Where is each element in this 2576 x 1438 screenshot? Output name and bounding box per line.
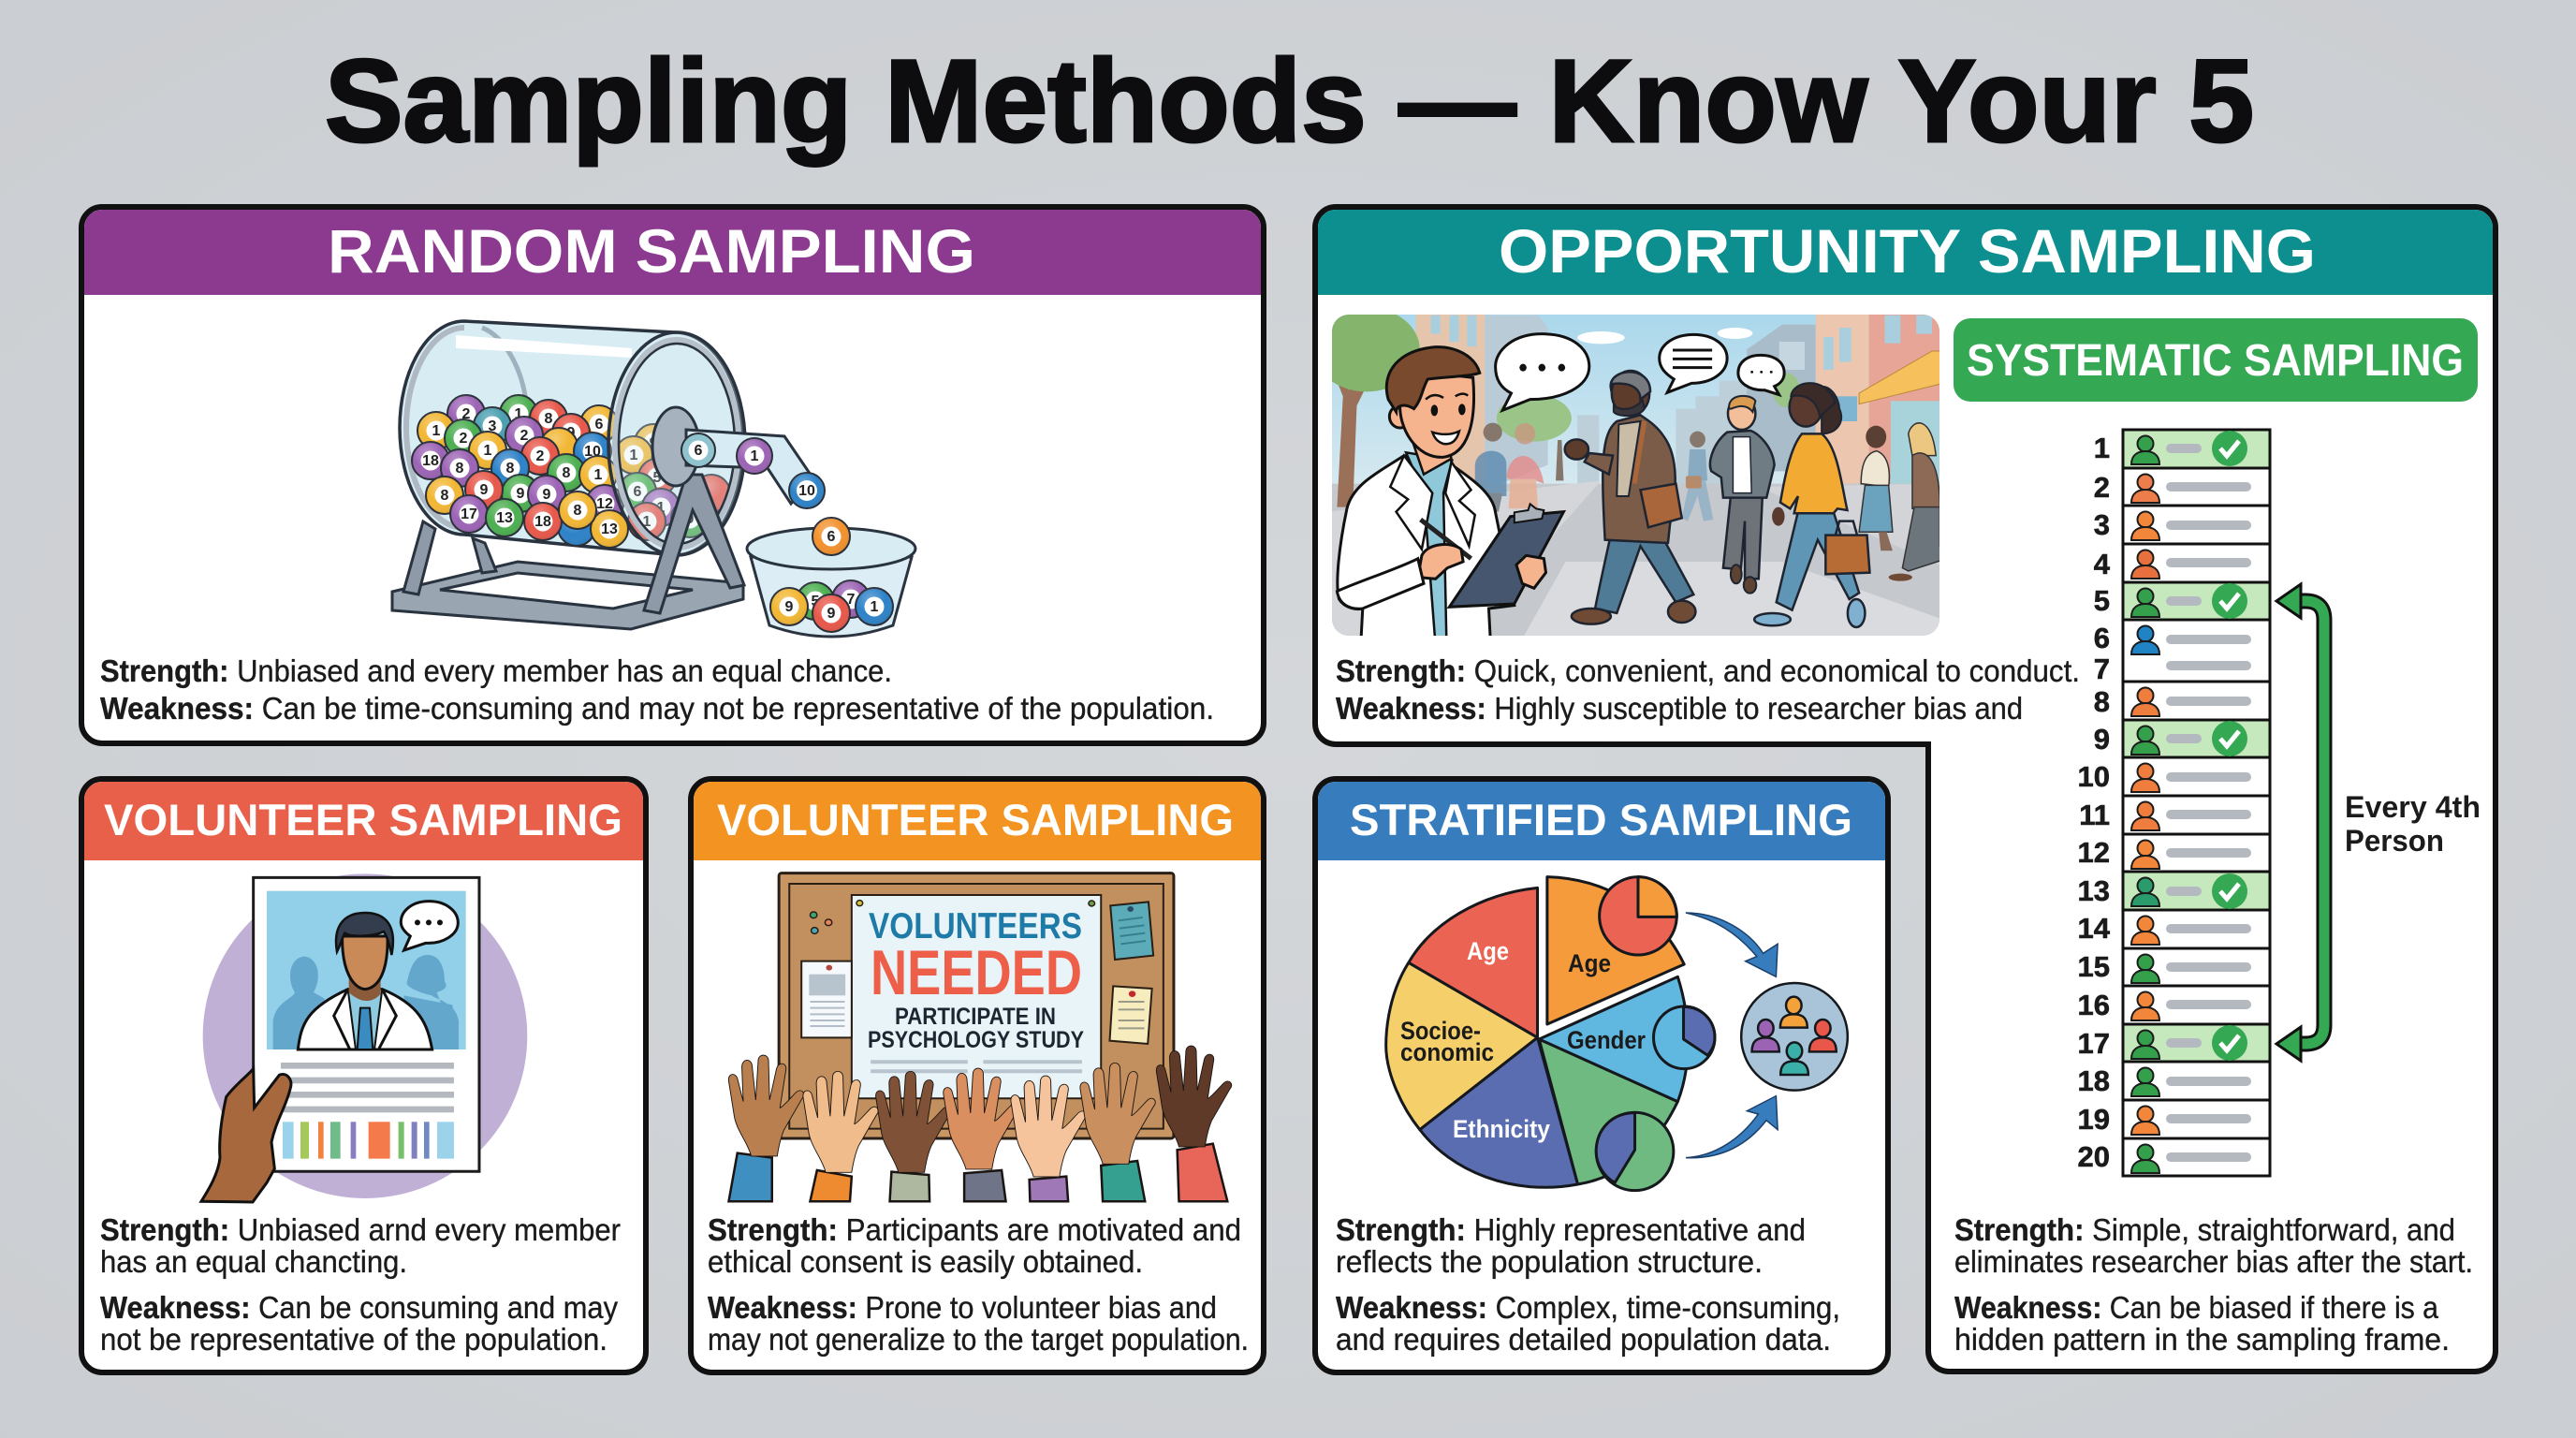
label: every 4th person: Person xyxy=(2345,824,2444,858)
text: volunteer strength and weakness: Weakness: Can be consuming and may xyxy=(100,1290,618,1325)
poster text xyxy=(868,906,1084,1053)
arrow: every fourth person interval xyxy=(2276,584,2324,1061)
header: stratified sampling xyxy=(1318,782,1885,860)
flyer page xyxy=(254,877,479,1171)
badge: systematic sampling: SYSTEMATIC SAMPLING xyxy=(1967,336,2464,386)
flyer photo xyxy=(267,891,466,1049)
pie labels: Gender xyxy=(1567,1026,1646,1054)
balls inside drum: 1 xyxy=(630,448,638,463)
balls inside drum: 9 xyxy=(567,425,576,441)
drum rear ring xyxy=(406,328,464,528)
background pedestrians xyxy=(1475,423,1713,521)
text: random strength and weakness xyxy=(100,653,1214,726)
row numbers: 2 xyxy=(2094,471,2110,504)
header: random sampling: RANDOM SAMPLING xyxy=(328,216,975,286)
row numbers: 15 xyxy=(2078,950,2110,983)
row numbers: 13 xyxy=(2078,874,2110,907)
balls inside drum: 9 xyxy=(543,487,551,503)
background pedestrian in brown jacket xyxy=(1889,422,1939,581)
text: systematic strength and weakness: eliminates researcher bias after the start. xyxy=(1954,1244,2473,1279)
panel: random sampling xyxy=(81,207,1264,743)
row numbers xyxy=(2078,432,2111,1173)
text: systematic strength and weakness: Strength: Simple, straightforward, and xyxy=(1954,1212,2455,1247)
right buildings xyxy=(1747,315,1939,484)
text: stratified strength and weakness: Strength: Highly representative and xyxy=(1336,1212,1806,1247)
text: systematic strength and weakness: Weakness: Can be biased if there is a xyxy=(1954,1290,2439,1325)
balls inside drum: 1 xyxy=(643,514,651,530)
balls inside drum: 5 xyxy=(653,470,662,486)
poster text: NEEDED xyxy=(871,937,1082,1008)
collection cup: 7 xyxy=(847,592,856,608)
row numbers: 1 xyxy=(2094,432,2110,464)
title: Sampling Methods — Know Your 5 xyxy=(325,37,2254,167)
illustration: researcher approaching people on street xyxy=(1313,307,1948,646)
pie labels: Age xyxy=(1568,949,1611,977)
illustration: stratified pie chart xyxy=(1386,877,1848,1191)
speech bubbles xyxy=(1496,334,1784,410)
text: volunteer strength and weakness xyxy=(100,1212,621,1357)
balls inside drum: 2 xyxy=(462,406,471,422)
person icons xyxy=(2131,436,2159,1173)
header: stratified sampling: STRATIFIED SAMPLING xyxy=(1350,795,1852,844)
sky xyxy=(1332,315,1939,484)
label: every 4th person xyxy=(2345,790,2481,858)
balls inside drum: 1 xyxy=(594,467,603,483)
drum front ring xyxy=(608,332,745,555)
text: volunteer board strength and weakness: may not generalize to the target population. xyxy=(708,1322,1249,1357)
balls inside drum: 1 xyxy=(432,423,441,439)
list rows xyxy=(2123,430,2270,1176)
lavender circle xyxy=(203,873,527,1198)
balls inside drum: 1 xyxy=(484,443,492,459)
balls inside drum: 18 xyxy=(422,453,439,469)
left note xyxy=(801,961,852,1037)
row numbers: 10 xyxy=(2078,760,2110,793)
header: random sampling xyxy=(84,210,1261,295)
illustration: lottery drum with numbered balls xyxy=(392,321,915,637)
text: volunteer strength and weakness: not be representative of the population. xyxy=(100,1322,607,1357)
poster text: VOLUNTEERS xyxy=(869,906,1082,946)
balls inside drum: 8 xyxy=(563,465,571,481)
balls in chute: 1 xyxy=(751,448,759,464)
balls in chute xyxy=(681,433,825,508)
poster placeholder lines xyxy=(871,1062,1082,1071)
raised hands xyxy=(728,1046,1232,1201)
left buildings xyxy=(1415,315,1548,483)
panel: stratified sampling xyxy=(1315,779,1888,1372)
holding hand xyxy=(201,1069,291,1202)
man in grey jacket xyxy=(1710,396,1775,594)
pie labels: Age xyxy=(1467,937,1509,965)
balls inside drum: 9 xyxy=(650,435,658,451)
balls inside drum: 10 xyxy=(584,444,601,460)
numbered sampling frame list xyxy=(2078,430,2270,1176)
header: volunteer sampling red xyxy=(84,782,643,860)
collection cup: 9 xyxy=(785,599,794,615)
balls inside drum: 8 xyxy=(506,461,515,477)
bubble contents xyxy=(1519,350,1773,374)
drum cylinder xyxy=(400,321,743,555)
header: volunteer sampling orange xyxy=(694,782,1261,860)
text: volunteer board strength and weakness: Weakness: Prone to volunteer bias and xyxy=(708,1290,1217,1325)
illustration: hand holding recruitment flyer xyxy=(201,873,527,1202)
drum stand base xyxy=(392,562,743,629)
text: random strength and weakness: Weakness: Can be time-consuming and may not be representative of the population. xyxy=(100,691,1214,726)
pie labels: Socioe- xyxy=(1400,1017,1481,1045)
right yellow note xyxy=(1110,986,1152,1044)
text: systematic strength and weakness: hidden pattern in the sampling frame. xyxy=(1954,1322,2450,1357)
drum inner band xyxy=(482,328,526,403)
text: opportunity strength and weakness xyxy=(1336,653,2080,726)
curved arrows xyxy=(1686,913,1778,1158)
text: volunteer board strength and weakness: ethical consent is easily obtained. xyxy=(708,1244,1143,1279)
balls inside drum: 9 xyxy=(480,482,489,498)
flyer colour strip xyxy=(283,1122,454,1159)
drum rear legs xyxy=(403,521,496,594)
header: opportunity sampling: OPPORTUNITY SAMPLING xyxy=(1499,216,2316,286)
balls inside drum: 2 xyxy=(520,428,529,444)
text: stratified strength and weakness: Weakness: Complex, time-consuming, xyxy=(1336,1290,1840,1325)
poster text: PSYCHOLOGY STUDY xyxy=(868,1027,1084,1053)
balls inside drum: 1 xyxy=(657,500,666,516)
collection cup: 1 xyxy=(871,599,879,615)
target sample circle xyxy=(1741,983,1848,1091)
balls inside drum: 8 xyxy=(441,488,449,504)
cork board xyxy=(779,873,1174,1138)
balls inside drum: 8 xyxy=(545,411,553,427)
row numbers: 4 xyxy=(2094,548,2111,580)
text: volunteer board strength and weakness xyxy=(708,1212,1249,1357)
balls inside drum: 8 xyxy=(456,461,464,477)
collection cup: 9 xyxy=(827,606,836,622)
selected row check marks xyxy=(2212,431,2247,1061)
row numbers: 11 xyxy=(2079,799,2110,831)
balls inside drum: 6 xyxy=(595,417,604,433)
header: opportunity sampling xyxy=(1318,210,2493,295)
background pedestrian in skirt xyxy=(1859,426,1893,550)
text: stratified strength and weakness: reflects the population structure. xyxy=(1336,1244,1763,1279)
woman in yellow sweater xyxy=(1754,383,1869,627)
man in brown coat xyxy=(1565,371,1695,624)
illustration: notice board xyxy=(779,873,1174,1138)
text: random strength and weakness: Strength: Unbiased and every member has an equal chance. xyxy=(100,653,892,688)
balls inside drum: 3 xyxy=(489,418,497,434)
flyer text lines xyxy=(281,1063,454,1112)
street ground xyxy=(1329,480,1947,646)
pie labels: Ethnicity xyxy=(1453,1115,1550,1143)
text: volunteer strength and weakness: has an equal chancting. xyxy=(100,1244,407,1279)
pie wedges xyxy=(1386,877,1688,1187)
row numbers: 17 xyxy=(2078,1027,2110,1060)
balls in chute: 10 xyxy=(798,483,815,499)
balls inside drum: 9 xyxy=(686,511,695,527)
placeholder name bars xyxy=(2166,444,2251,1162)
text: stratified strength and weakness xyxy=(1336,1212,1840,1357)
drum hub xyxy=(652,407,699,486)
trees xyxy=(1313,307,1800,507)
label: every 4th person: Every 4th xyxy=(2345,790,2481,824)
row numbers: 5 xyxy=(2094,584,2110,617)
balls inside drum: 2 xyxy=(460,431,468,447)
panel: volunteer sampling, poster xyxy=(81,779,646,1372)
balls inside drum xyxy=(412,395,730,548)
row numbers: 6 xyxy=(2094,622,2110,654)
inset circles xyxy=(1596,877,1715,1191)
poster text: PARTICIPATE IN xyxy=(895,1004,1056,1030)
collection cup: 6 xyxy=(827,529,836,545)
text: stratified strength and weakness: and requires detailed population data. xyxy=(1336,1322,1831,1357)
row numbers: 12 xyxy=(2078,836,2110,869)
text: volunteer strength and weakness: Strength: Unbiased arnd every member xyxy=(100,1212,621,1247)
row numbers: 8 xyxy=(2094,685,2110,718)
drum highlight xyxy=(456,335,632,358)
clouds xyxy=(1577,328,1752,344)
text: opportunity strength and weakness: Strength: Quick, convenient, and economical to conduct. xyxy=(1336,653,2080,688)
badge: systematic sampling xyxy=(1954,318,2478,402)
researcher with clipboard xyxy=(1337,347,1563,646)
balls inside drum: 13 xyxy=(496,510,513,526)
balls inside drum: 12 xyxy=(596,496,613,512)
balls inside drum: 18 xyxy=(534,514,551,530)
pie labels xyxy=(1400,937,1646,1143)
text: systematic strength and weakness xyxy=(1954,1212,2473,1357)
row numbers: 3 xyxy=(2094,508,2110,541)
text: volunteer board strength and weakness: Strength: Participants are motivated and xyxy=(708,1212,1241,1247)
pie labels: conomic xyxy=(1400,1038,1494,1066)
balls inside drum: 13 xyxy=(601,521,618,537)
balls inside drum: 2 xyxy=(536,448,545,464)
header: volunteer sampling red: VOLUNTEER SAMPLING xyxy=(104,795,622,844)
balls inside drum: 6 xyxy=(634,484,642,500)
main poster xyxy=(852,895,1101,1098)
row numbers: 7 xyxy=(2094,653,2110,685)
row numbers: 20 xyxy=(2078,1140,2110,1173)
text: opportunity strength and weakness: Weakness: Highly susceptible to researcher bias and xyxy=(1336,691,2023,726)
row numbers: 9 xyxy=(2094,723,2110,756)
row numbers: 18 xyxy=(2078,1064,2110,1097)
panel: opportunity and systematic sampling outline xyxy=(1313,207,2496,1372)
balls inside drum: 17 xyxy=(461,506,477,522)
collection cup xyxy=(747,518,915,637)
row numbers: 19 xyxy=(2078,1103,2110,1136)
board pins xyxy=(810,901,1095,933)
header: volunteer sampling orange: VOLUNTEER SAMPLING xyxy=(717,795,1234,844)
right teal note xyxy=(1110,902,1153,960)
drum front legs xyxy=(644,475,744,613)
collection cup: 5 xyxy=(812,594,820,609)
row numbers: 16 xyxy=(2078,989,2110,1021)
balls in chute: 6 xyxy=(695,443,703,459)
balls inside drum: 8 xyxy=(574,503,582,519)
row numbers: 14 xyxy=(2078,912,2111,945)
balls inside drum: 1 xyxy=(515,406,523,422)
exit chute xyxy=(686,430,812,504)
distant buildings xyxy=(1577,381,1755,490)
balls inside drum: 9 xyxy=(517,486,525,502)
panel: volunteer sampling, notice board xyxy=(691,779,1264,1372)
